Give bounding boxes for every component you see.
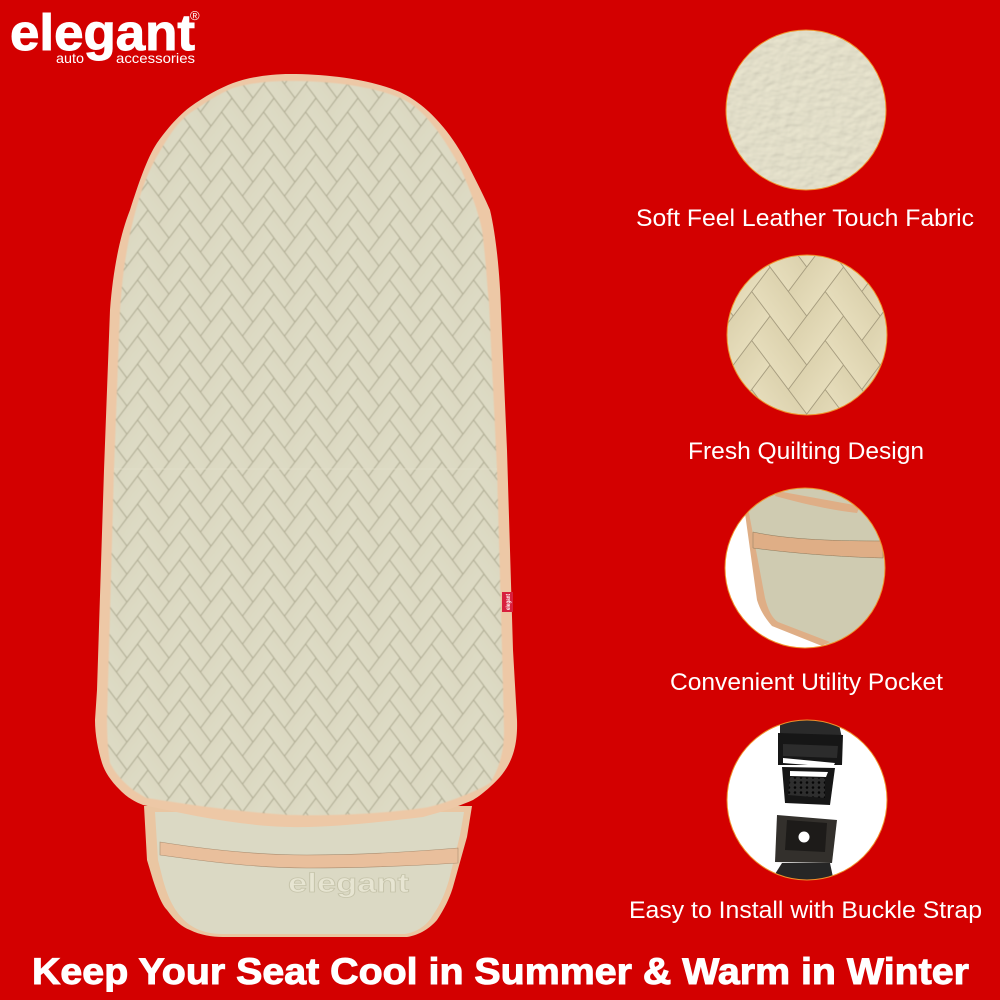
embossed brand text: elegant <box>288 868 409 898</box>
bottom pocket flap <box>144 806 472 937</box>
circle: buckle photo <box>727 720 887 882</box>
red brand tag <box>502 592 513 612</box>
circle rim <box>725 488 885 648</box>
caption: Easy to Install with Buckle Strap <box>629 897 982 924</box>
seat cushion product <box>95 74 517 937</box>
horizontal fabric seam <box>114 468 497 470</box>
brand logo <box>10 4 200 66</box>
logo wordmark: elegant <box>10 4 195 61</box>
registered mark: ® <box>190 8 200 23</box>
feature: quilting <box>688 255 924 465</box>
circle rim <box>727 255 887 415</box>
pocket binding strip <box>160 842 458 868</box>
circle: pocket close-up <box>726 488 884 648</box>
caption: Fresh Quilting Design <box>688 438 924 465</box>
bottom headline: Keep Your Seat Cool in Summer & Warm in Winter <box>32 951 969 992</box>
red brand tag: elegant <box>506 594 512 610</box>
pocket strip <box>753 532 883 558</box>
caption: Convenient Utility Pocket <box>670 669 943 696</box>
logo tagline accessories: accessories <box>116 50 195 66</box>
circle: quilting close-up <box>727 255 887 415</box>
feature: buckle strap <box>629 720 982 924</box>
quilted herringbone fabric <box>107 81 504 815</box>
circle rim <box>727 720 887 880</box>
caption: Soft Feel Leather Touch Fabric <box>636 205 974 232</box>
seat binding edge <box>95 74 517 827</box>
logo tagline auto: auto <box>56 50 84 66</box>
circle: leather touch texture <box>726 30 886 190</box>
feature: soft fabric <box>636 30 974 232</box>
circle rim <box>726 30 886 190</box>
feature: utility pocket <box>670 480 943 696</box>
